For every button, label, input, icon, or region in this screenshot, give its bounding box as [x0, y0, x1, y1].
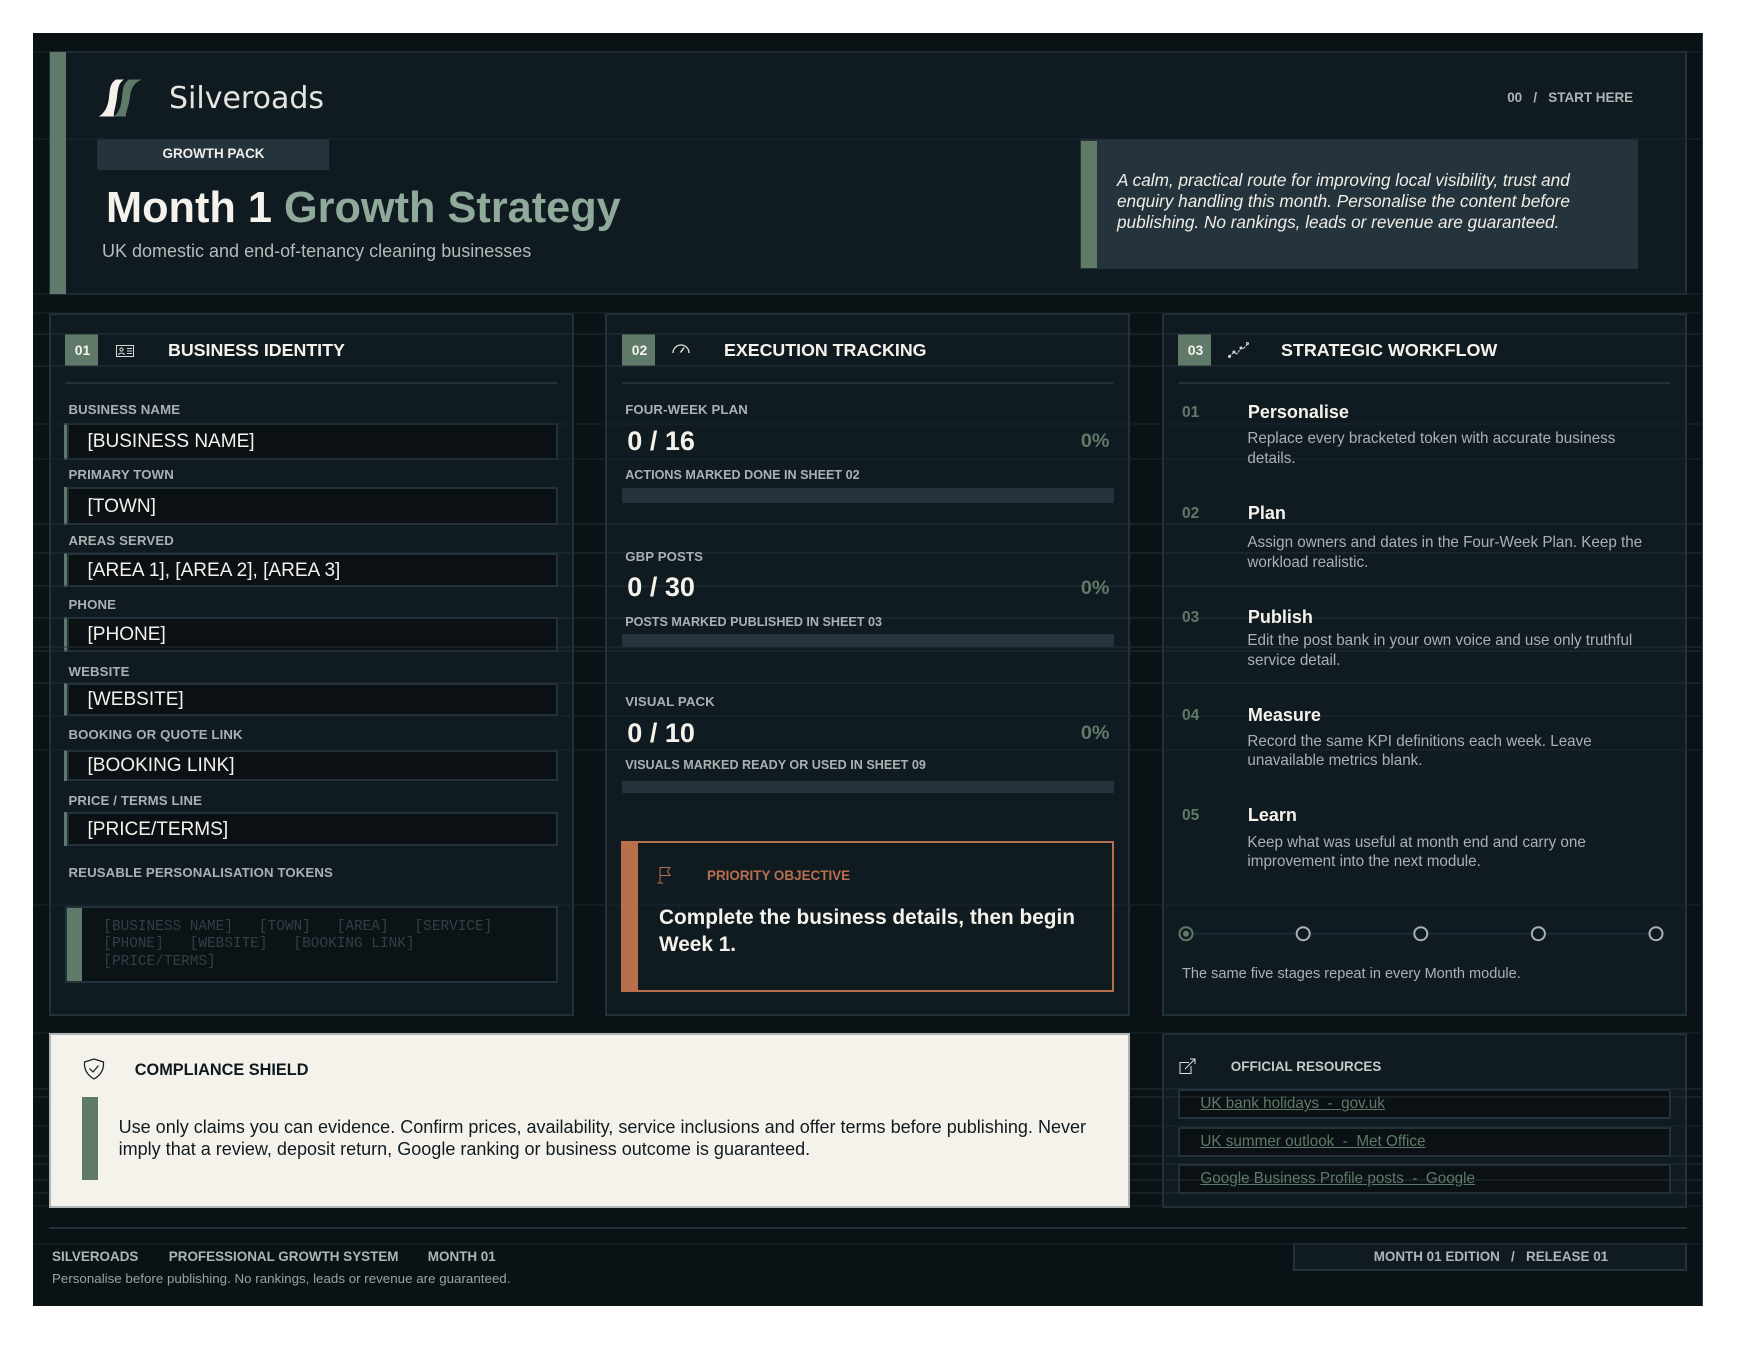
label: price terms line: PRICE / TERMS LINE	[68, 793, 202, 808]
heading: EXECUTION TRACKING	[724, 340, 927, 360]
link: Google Business Profile posts: Google Business Profile posts - Google	[1200, 1170, 1475, 1187]
label: four-week plan: FOUR-WEEK PLAN	[625, 402, 748, 417]
brand name: Silveroads	[169, 80, 324, 116]
quote text: A calm, practical route for improving local visibility, trust and enquiry handling this month. Personalise the content before publishing. No rankings, leads or revenue are guaranteed.	[1117, 170, 1570, 232]
priority label: PRIORITY OBJECTIVE	[707, 868, 850, 883]
count: GBP posts: 0 / 30	[627, 572, 695, 602]
resources heading: OFFICIAL RESOURCES	[1231, 1059, 1381, 1074]
label: website: WEBSITE	[68, 664, 130, 679]
title: Month 1 Growth Strategy	[106, 184, 621, 232]
field: areas served: [AREA 1], [AREA 2], [AREA 3]	[88, 560, 340, 580]
progress bar: GBP posts	[622, 634, 1114, 647]
field: website: [WEBSITE]	[88, 688, 184, 710]
caption: four-week plan: ACTIONS MARKED DONE IN SHEET 02	[625, 468, 860, 482]
label: areas served: AREAS SERVED	[68, 533, 174, 548]
field: booking link: [BOOKING LINK]	[88, 754, 234, 776]
step number 04: 04	[1182, 707, 1199, 724]
percent: GBP posts: 0%	[1081, 577, 1110, 599]
section badge 02: 02	[632, 342, 647, 358]
step number 03: 03	[1182, 608, 1199, 626]
compliance heading: COMPLIANCE SHIELD	[135, 1061, 308, 1079]
footer month: MONTH 01	[428, 1249, 496, 1264]
compliance accent bar	[82, 1097, 98, 1180]
subtitle: UK domestic and end-of-tenancy cleaning businesses	[102, 241, 531, 261]
step text: learn: Keep what was useful at month end and carry one improvement into the next module.	[1247, 834, 1586, 870]
panel: strategic workflow	[1162, 313, 1687, 1016]
priority accent bar	[621, 841, 638, 992]
label: reusable tokens: REUSABLE PERSONALISATION TOKENS	[68, 865, 333, 880]
priority text: Complete the business details, then begin Week 1.	[659, 906, 1075, 956]
section badge 02	[622, 334, 655, 366]
step number 05: 05	[1182, 807, 1199, 824]
section badge 03: 03	[1188, 342, 1203, 358]
icon: trend line	[1228, 342, 1249, 358]
section badge 01	[65, 334, 98, 366]
callout: priority objective	[621, 841, 1114, 992]
field: primary town: [TOWN]	[88, 496, 156, 517]
callout: intro quote	[1080, 139, 1638, 269]
icon: shield	[84, 1058, 104, 1080]
label: primary town: PRIMARY TOWN	[68, 467, 174, 482]
heading: STRATEGIC WORKFLOW	[1281, 340, 1497, 360]
step text: publish: Edit the post bank in your own voice and use only truthful service detail.	[1247, 632, 1632, 669]
link: UK summer outlook: UK summer outlook - Met Office	[1200, 1133, 1426, 1150]
field: website	[64, 683, 558, 716]
token box	[65, 906, 558, 983]
field: phone: [PHONE]	[88, 624, 166, 644]
chip: growth pack	[97, 139, 329, 170]
step title: measure: Measure	[1248, 705, 1321, 725]
field: price terms: [PRICE/TERMS]	[88, 819, 228, 840]
footer system name: PROFESSIONAL GROWTH SYSTEM	[169, 1249, 398, 1264]
percent: four-week plan: 0%	[1081, 430, 1110, 452]
field: business name: [BUSINESS NAME]	[88, 430, 255, 452]
step title: learn: Learn	[1248, 805, 1297, 825]
section badge 01: 01	[75, 342, 90, 358]
panel: header	[49, 51, 1687, 295]
link: UK bank holidays: UK bank holidays - gov.uk	[1200, 1095, 1385, 1112]
divider	[622, 382, 1113, 384]
footer brand: SILVEROADS	[52, 1249, 138, 1264]
link: UK bank holidays	[1178, 1089, 1671, 1119]
section marker: 00 / START HERE	[1507, 90, 1633, 105]
panel: business identity	[49, 313, 574, 1016]
edition box	[1293, 1243, 1687, 1271]
label: booking or quote link: BOOKING OR QUOTE LINK	[68, 727, 243, 742]
divider	[1178, 382, 1670, 384]
step number 02: 02	[1182, 504, 1199, 522]
progress bar: visual pack	[622, 781, 1114, 793]
section badge 03	[1178, 334, 1211, 366]
label: visual pack: VISUAL PACK	[625, 694, 715, 709]
panel: official resources	[1162, 1033, 1687, 1208]
panel: execution tracking	[605, 313, 1130, 1016]
step title: personalise: Personalise	[1248, 402, 1349, 422]
count: visual pack: 0 / 10	[627, 718, 695, 748]
label: phone: PHONE	[68, 597, 116, 612]
link: UK summer outlook	[1178, 1127, 1671, 1157]
field: areas served	[64, 553, 558, 587]
stage timeline	[1178, 926, 1664, 942]
quote accent bar	[1081, 141, 1097, 268]
caption: GBP posts: POSTS MARKED PUBLISHED IN SHEET 03	[625, 615, 882, 629]
header accent bar	[50, 52, 66, 294]
label: business name: BUSINESS NAME	[68, 402, 180, 417]
progress bar: four-week plan	[622, 488, 1114, 503]
field: phone	[64, 617, 558, 652]
edition text: MONTH 01 EDITION / RELEASE 01	[1374, 1249, 1608, 1264]
timeline note: The same five stages repeat in every Month module.	[1182, 966, 1521, 982]
heading: BUSINESS IDENTITY	[168, 340, 345, 360]
label: GBP posts: GBP POSTS	[625, 549, 703, 564]
icon: Silveroads logo mark	[99, 80, 142, 116]
step title: plan: Plan	[1248, 503, 1286, 523]
icon: flag	[658, 867, 671, 884]
panel: compliance shield	[48, 1033, 1130, 1208]
chip label: GROWTH PACK	[162, 146, 265, 161]
field: primary town	[64, 487, 558, 525]
step text: plan: Assign owners and dates in the Four-Week Plan. Keep the workload realistic.	[1247, 534, 1642, 571]
icon: gauge	[672, 344, 690, 353]
step title: publish: Publish	[1248, 607, 1313, 627]
count: four-week plan: 0 / 16	[627, 426, 695, 456]
field: business name	[64, 423, 558, 460]
footer rule	[49, 1227, 1687, 1229]
compliance text: Use only claims you can evidence. Confirm prices, availability, service inclusions and offer terms before publishing. Never imply that a review, deposit return, Google ranking or business outcome is guaranteed.	[119, 1117, 1086, 1159]
footer	[49, 1227, 1687, 1286]
divider	[65, 382, 557, 384]
link: Google Business Profile posts	[1178, 1164, 1671, 1194]
field: price terms	[64, 812, 558, 846]
icon: external link	[1180, 1058, 1196, 1074]
icon: id card	[116, 345, 134, 357]
percent: visual pack: 0%	[1081, 722, 1110, 744]
step text: measure: Record the same KPI definitions each week. Leave unavailable metrics blank.	[1247, 732, 1592, 769]
step text: personalise: Replace every bracketed token with accurate business details.	[1247, 430, 1615, 467]
step number 01: 01	[1182, 404, 1199, 420]
caption: visual pack: VISUALS MARKED READY OR USED IN SHEET 09	[625, 758, 926, 772]
field: booking link	[64, 750, 558, 781]
token accent bar	[66, 908, 82, 981]
footer disclaimer: Personalise before publishing. No rankings, leads or revenue are guaranteed.	[52, 1271, 510, 1286]
token list: [BUSINESS NAME] [TOWN] [AREA] [SERVICE] [PHONE] [WEBSITE] [BOOKING LINK] [PRICE/TERMS]	[103, 919, 492, 970]
